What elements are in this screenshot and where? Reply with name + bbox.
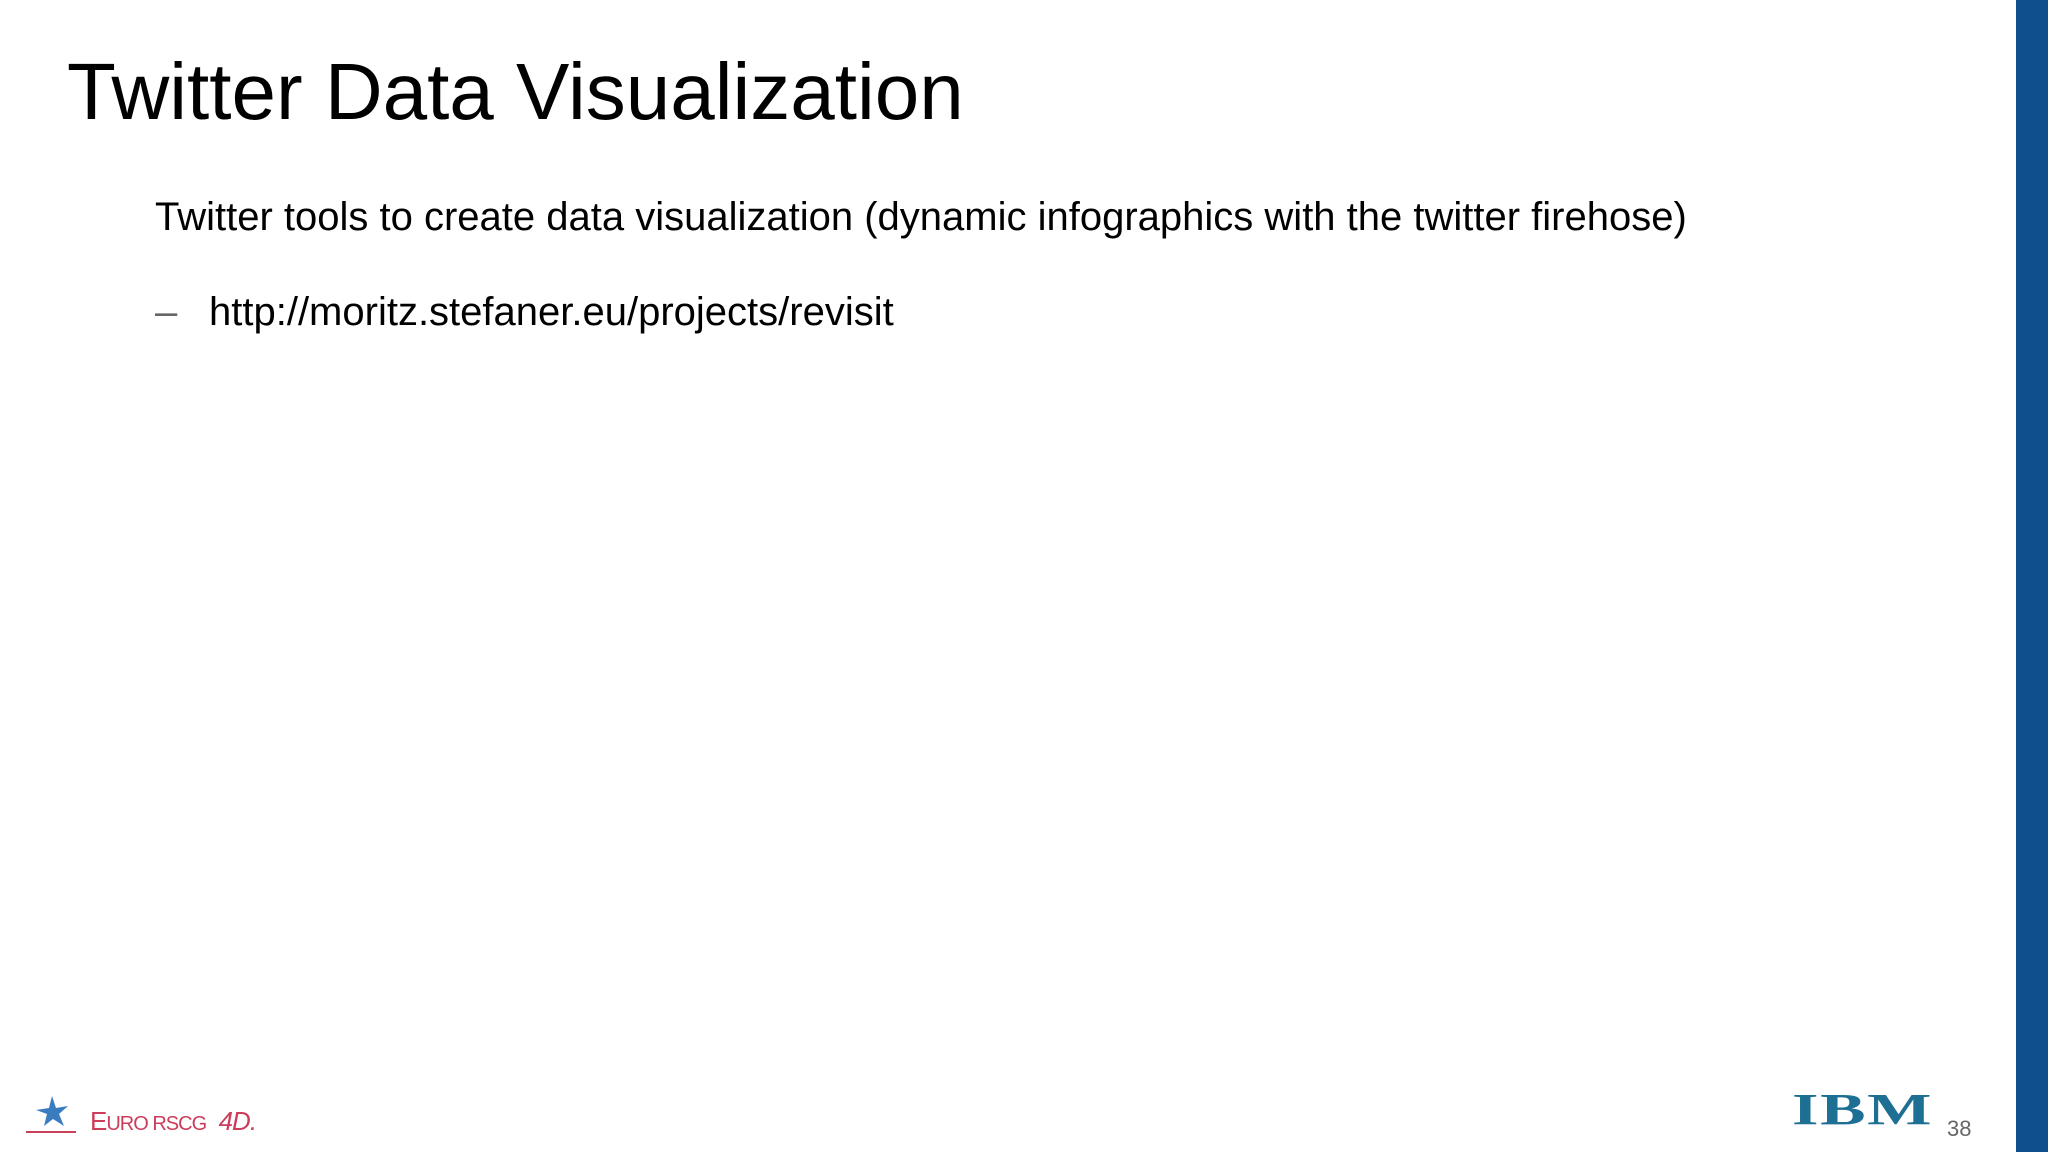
logo: Euro RSCG 4D [26, 1096, 256, 1136]
bullet: link: – [155, 290, 177, 334]
page number: 38 [1947, 1116, 1971, 1141]
subtitle text: Twitter tools to create data visualization (dynamic infographics with the twitter firehose) [155, 195, 1687, 239]
side bar [2016, 0, 2048, 1152]
title: Twitter Data Visualization [67, 47, 964, 136]
logo: IBM: IBM [1792, 1085, 1933, 1134]
icon: star [26, 1096, 76, 1133]
bullet: link: http://moritz.stefaner.eu/projects/revisit [209, 290, 894, 334]
logo: Euro RSCG 4D: EURO RSCG 4D. [90, 1106, 256, 1136]
